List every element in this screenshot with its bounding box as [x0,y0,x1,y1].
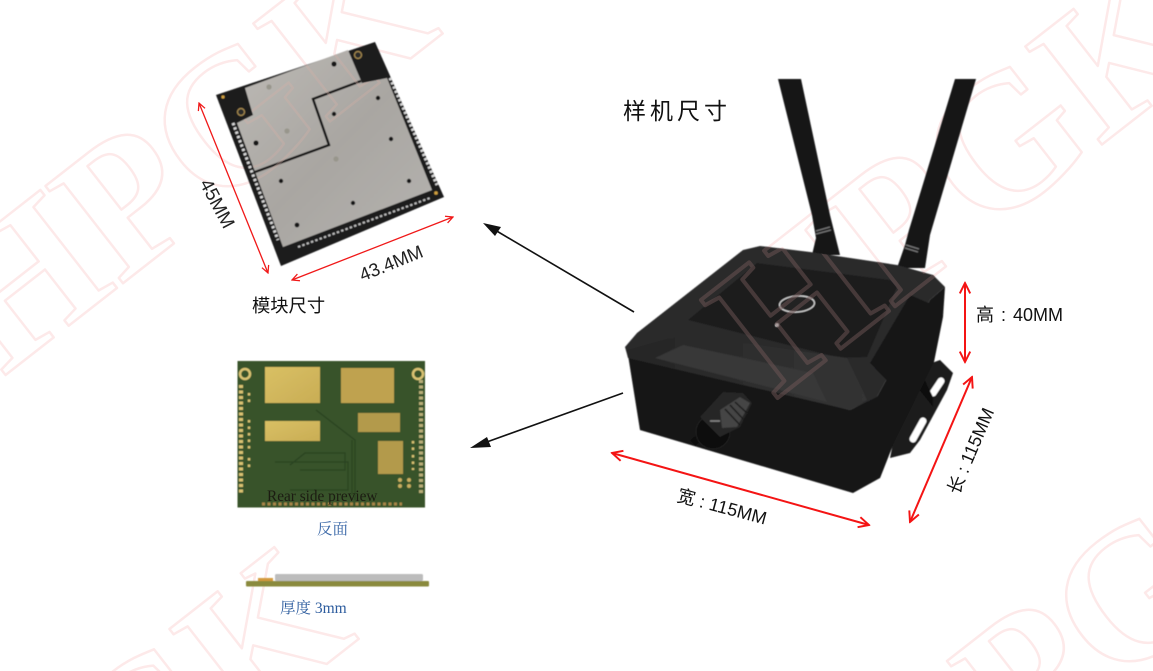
module side view [246,574,429,586]
module board [216,42,444,266]
heading: sample size: 样机尺寸 [623,98,731,124]
front inner band [655,345,827,402]
module screw holes [253,61,411,227]
dimension arrow: 43.4MM [292,217,453,280]
status LED [775,323,779,327]
side chamfer panel [870,295,933,387]
device side face [877,287,945,478]
PCB corner marks [240,369,423,379]
label: height: 40MM [1013,305,1063,325]
side view chip [258,578,273,582]
device top [625,246,945,410]
module pads [233,78,437,247]
rear preview caption: Rear side preview [267,488,377,505]
cable [693,430,707,443]
watermark on module [237,50,432,247]
rear PCB photo [238,361,425,508]
label: length: 长 : 115MM [944,405,998,497]
dimension arrow: length [910,377,972,522]
label: thickness: 厚度 3mm [280,599,347,617]
antenna collar rings [816,227,919,252]
PCB gold pads [265,367,403,474]
top ring button [779,295,815,313]
PCB edge pads [241,380,421,504]
side view shield [275,574,423,581]
PCB bottom right pads [398,478,411,488]
mounting bracket [890,360,953,458]
dimension arrow: width [612,453,869,525]
left antenna [778,79,840,255]
module corner dots [221,95,438,195]
top panel [688,263,897,358]
label: 45MM: 45MM [195,176,238,232]
front chamfer band [627,334,867,410]
gland ribs [720,397,750,428]
PCB board [238,361,425,508]
side view board [246,581,429,586]
module shield gap [255,81,361,172]
cable gland nut [696,415,730,449]
PCB traces [275,410,355,500]
module shield plate [237,50,432,247]
device front face [628,355,893,493]
bracket slots [913,381,941,439]
watermark on device [625,246,945,493]
right antenna [897,79,976,268]
device photo [625,79,976,493]
label: height: 高 [976,305,994,325]
dimension arrow: height [964,283,966,362]
label: rear side: 反面 [317,520,348,538]
cable gland body [700,392,752,437]
dimension arrow: 45MM [199,103,268,273]
bracket rib [913,367,933,407]
black arrow to module rear [470,393,623,448]
black arrow to module top [483,223,634,312]
label: module size: 模块尺寸 [252,295,325,316]
module antenna connectors [238,52,362,116]
label: 43.4MM: 43.4MM [356,241,426,285]
gland highlight [710,420,720,422]
label: width: 宽 : 115MM [675,485,769,529]
label: height: : [1001,305,1006,325]
module top photo [216,42,444,266]
